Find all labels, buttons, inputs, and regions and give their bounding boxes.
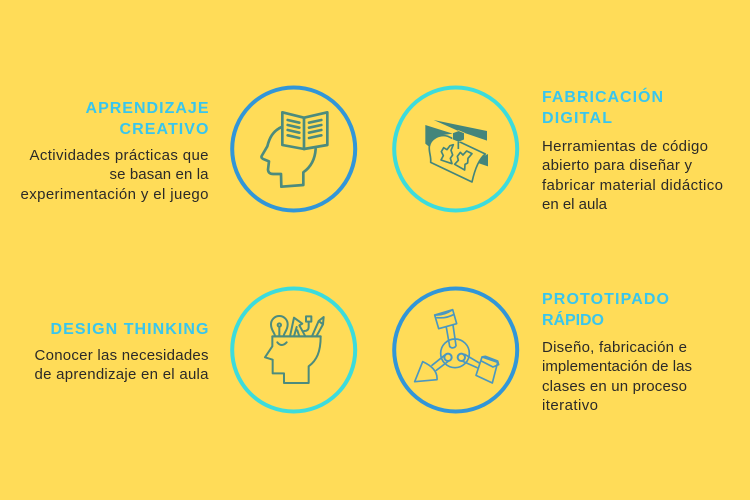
text: aprendizaje creativo description: se basan en la [110, 166, 209, 183]
text: design thinking description: de aprendizaje en el aula [34, 366, 209, 383]
text: aprendizaje creativo description: Actividades prácticas que [30, 147, 208, 164]
icon: head with ideas and tools [232, 288, 355, 412]
heading: fabricacion digital: FABRICACIÓN [542, 87, 663, 106]
panel: aprendizaje creativo [20, 88, 355, 210]
heading: prototipado rapido: RÁPIDO [542, 310, 604, 329]
heading: prototipado rapido [542, 291, 669, 329]
text: prototipado rapido description: Diseño, fabricación e [542, 339, 687, 356]
heading: fabricacion digital [542, 87, 663, 127]
icon: digital fabrication machine [394, 88, 517, 210]
text: fabricacion digital description: en el aula [542, 196, 608, 213]
text: design thinking description: Conocer las necesidades [34, 347, 208, 364]
text: prototipado rapido description [542, 339, 692, 414]
icon: rapid prototyping tool head [394, 288, 517, 412]
text: prototipado rapido description: implementación de las [542, 358, 692, 375]
text: prototipado rapido description: clases en un proceso [542, 378, 687, 395]
heading: aprendizaje creativo [86, 100, 209, 138]
text: fabricacion digital description: Herramientas de código [542, 138, 708, 155]
panel: prototipado rapido [394, 288, 692, 414]
heading: fabricacion digital: DIGITAL [542, 110, 612, 127]
text: fabricacion digital description: fabricar material didáctico [542, 177, 723, 194]
text: aprendizaje creativo description: experimentación y el juego [20, 186, 208, 203]
heading: aprendizaje creativo: CREATIVO [120, 121, 208, 138]
heading: prototipado rapido: PROTOTIPADO [542, 291, 669, 308]
text: design thinking description [34, 347, 209, 383]
panel: fabricacion digital [394, 87, 723, 213]
text: aprendizaje creativo description [20, 147, 209, 203]
icon: head with open book [232, 88, 355, 210]
text: prototipado rapido description: iterativo [542, 397, 598, 414]
text: fabricacion digital description [542, 138, 723, 213]
heading: aprendizaje creativo: APRENDIZAJE [86, 100, 209, 117]
text: fabricacion digital description: abierto para diseñar y [542, 157, 692, 174]
panel: design thinking [34, 288, 355, 412]
heading: design thinking: DESIGN THINKING [50, 321, 208, 338]
